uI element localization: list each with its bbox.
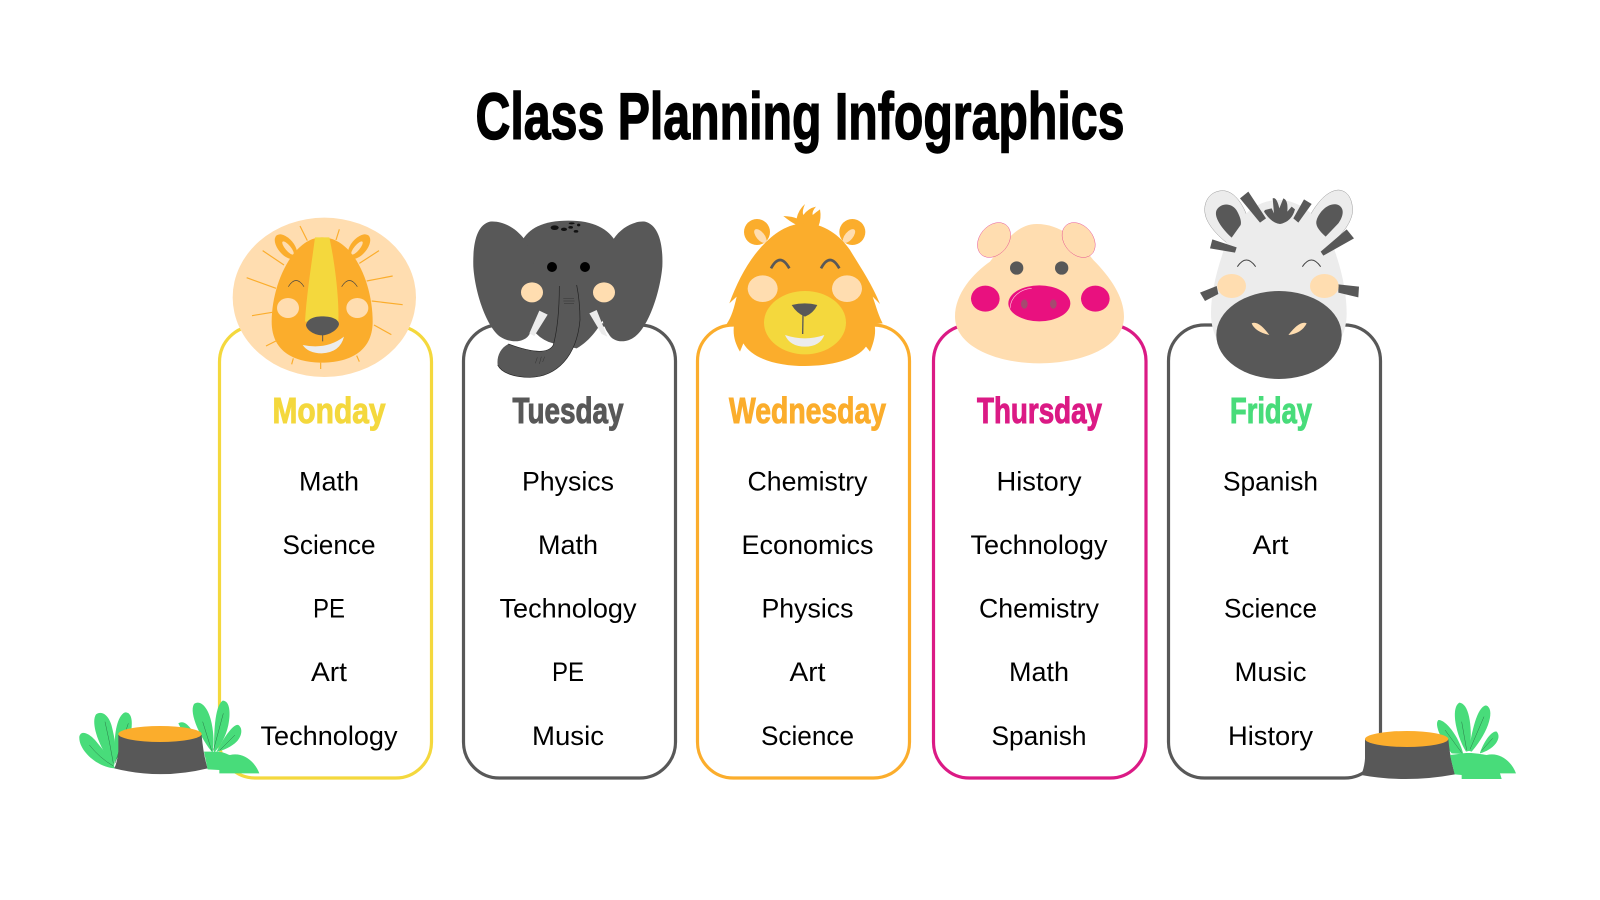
subject list: Wednesday <box>742 466 874 751</box>
subject list: Monday <box>260 466 398 751</box>
card outline: Friday <box>1168 325 1380 778</box>
heading: Friday: Friday <box>1230 390 1312 431</box>
subject list: Monday: Technology <box>260 721 398 751</box>
subject list: Monday: Art <box>311 657 348 687</box>
subject list: Thursday: Math <box>1009 657 1069 687</box>
subject list: Tuesday <box>500 466 637 751</box>
subject list: Wednesday: Chemistry <box>748 466 868 496</box>
subject list: Friday: Music <box>1234 657 1306 687</box>
heading: Wednesday: Wednesday <box>729 390 886 431</box>
heading: Thursday: Thursday <box>977 390 1102 431</box>
subject list: Friday: Spanish <box>1223 466 1318 496</box>
title: Class Planning Infographics <box>476 79 1124 153</box>
subject list: Tuesday: Math <box>538 530 598 560</box>
subject list: Tuesday: PE <box>552 657 584 687</box>
subject list: Friday: Science <box>1224 594 1317 624</box>
subject list: Monday: Math <box>299 466 359 496</box>
card outline: Tuesday <box>464 325 676 778</box>
subject list: Thursday <box>970 466 1108 751</box>
heading: Monday: Monday <box>272 390 386 431</box>
subject list: Wednesday: Science <box>761 721 854 751</box>
icon: zebra <box>1200 190 1359 379</box>
card outline: Wednesday <box>698 325 910 778</box>
panel: Wednesday <box>698 204 910 778</box>
subject list: Thursday: Spanish <box>992 721 1086 751</box>
icon: left tree stump with plants <box>79 701 259 774</box>
icon: pig <box>955 216 1124 363</box>
card outline: Monday <box>220 326 432 778</box>
subject list: Wednesday: Art <box>790 657 826 687</box>
subject list: Tuesday: Music <box>532 721 604 751</box>
subject list: Thursday: Technology <box>970 530 1108 560</box>
panel: Tuesday <box>464 221 676 778</box>
subject list: Monday: PE <box>313 594 345 624</box>
subject list: Wednesday: Physics <box>762 594 854 624</box>
subject list: Tuesday: Physics <box>522 466 614 496</box>
heading: Tuesday: Tuesday <box>512 390 624 431</box>
subject list: Thursday: Chemistry <box>979 594 1099 624</box>
icon: elephant <box>473 221 662 377</box>
subject list: Thursday: History <box>996 466 1082 496</box>
icon: lion <box>233 218 416 377</box>
panel: Thursday <box>934 216 1146 778</box>
subject list: Tuesday: Technology <box>500 594 637 624</box>
panel: Friday <box>1168 190 1380 778</box>
card outline: Thursday <box>934 325 1146 778</box>
subject list: Wednesday: Economics <box>742 530 874 560</box>
subject list: Friday: Art <box>1252 530 1289 560</box>
subject list: Monday: Science <box>282 530 376 560</box>
subject list: Friday <box>1223 466 1318 751</box>
icon: bear <box>727 204 883 366</box>
subject list: Friday: History <box>1228 721 1313 751</box>
panel: Monday <box>220 218 432 778</box>
icon: right tree stump with plants <box>1361 703 1516 779</box>
